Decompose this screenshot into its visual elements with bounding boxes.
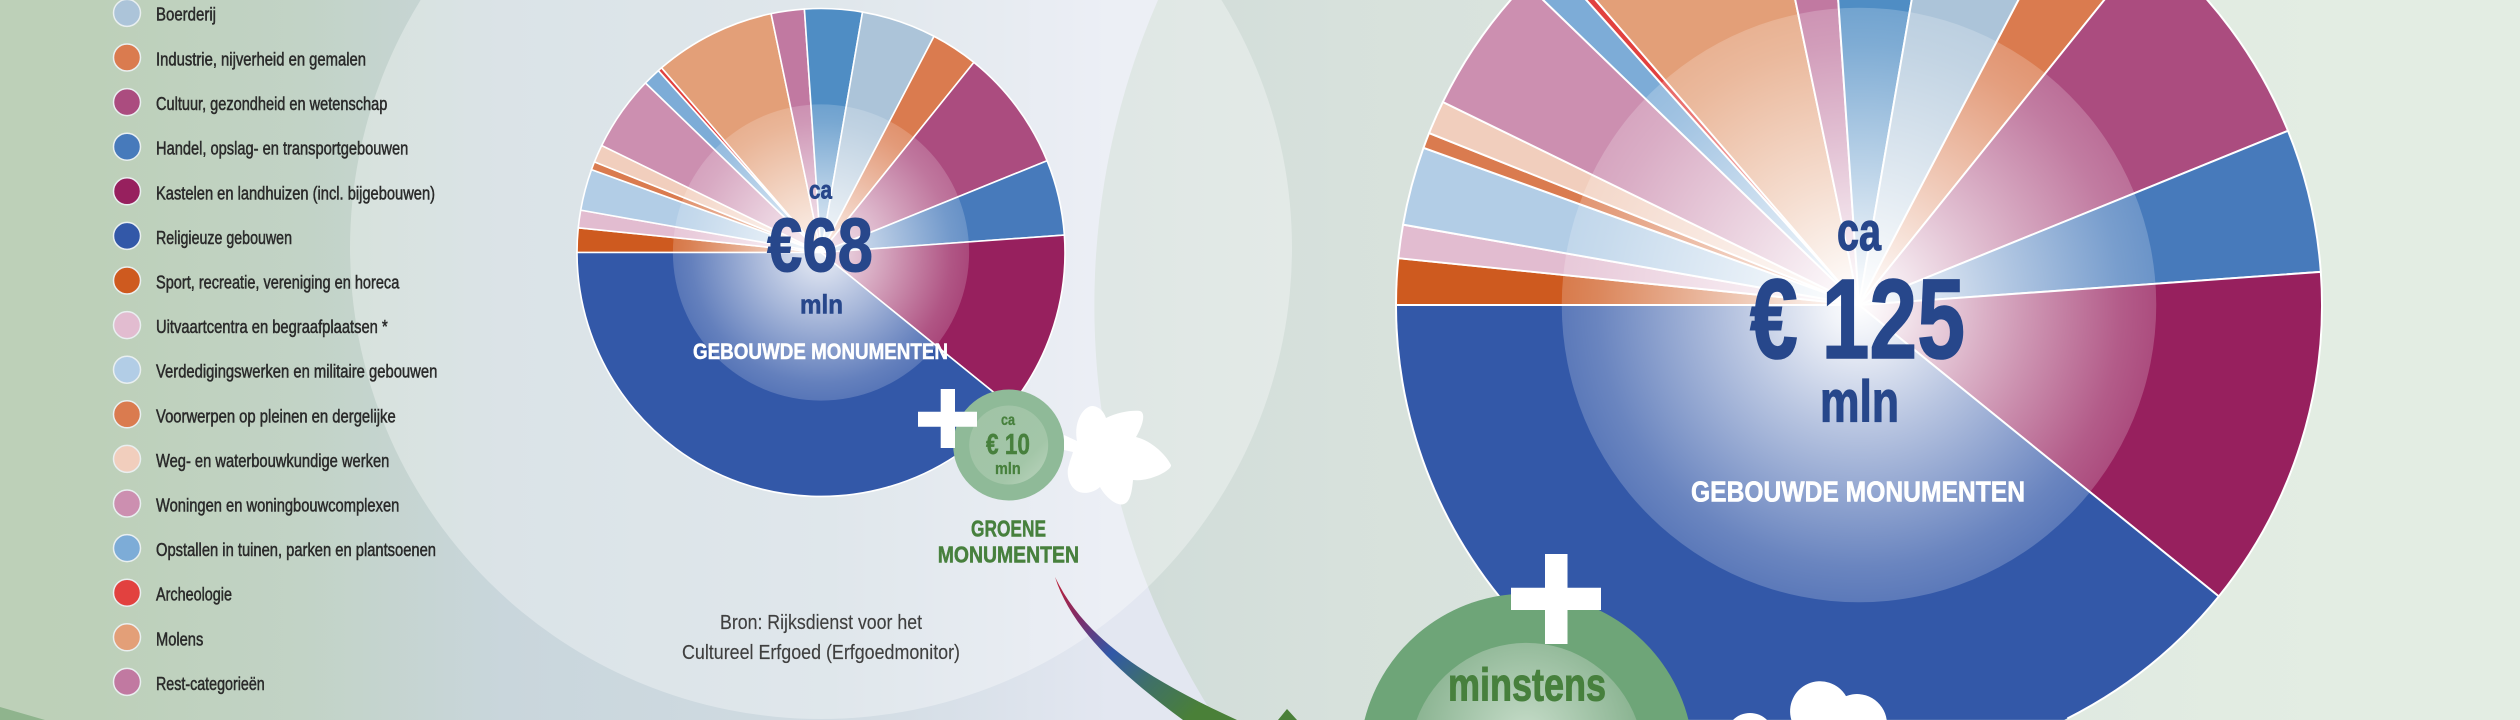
legend item: Woningen [114,490,399,517]
legend item: Sport [114,267,400,294]
legend item: Cultuur [114,89,387,116]
legend item: Sport: Sport, recreatie, vereniging en horeca [156,272,400,292]
legend item: Opstallen [114,535,436,562]
legend item: Opstallen: Opstallen in tuinen, parken en plantsoenen [156,540,436,560]
small green circle: mln [995,459,1021,478]
large pie label: ca: ca [1837,202,1882,262]
legend item: Voorwerpen: Voorwerpen op pleinen en dergelijke [156,406,396,426]
small pie chart: gebouwde monumenten [577,8,1065,496]
large pie chart: gebouwde monumenten [1396,0,2322,720]
legend item: Cultuur: Cultuur, gezondheid en wetenschap [156,94,387,114]
label: groene monumenten: GROENE [971,516,1046,542]
small pie label: ca: ca [809,174,832,204]
legend item: Religieuze gebouwen [114,222,292,249]
legend item: Weg- en waterbouw [114,445,389,472]
large background circle [1094,0,2520,720]
legend item: Woningen: Woningen en woningbouwcomplexen [156,496,399,516]
arrow: curved gradient [1055,577,1237,720]
legend item: Voorwerpen [114,401,396,428]
label: groene monumenten: MONUMENTEN [938,542,1079,568]
source note: Bron: Rijksdienst voor het [720,611,922,634]
legend [114,0,437,695]
large pie value: € 125 [1750,256,1965,382]
small pie value: €68 [767,204,873,288]
large green circle [1364,594,1688,720]
legend item: Weg- en waterbouw: Weg- en waterbouwkundige werken [156,451,389,471]
legend item: Molens [114,624,203,651]
large pie heading: GEBOUWDE MONUMENTEN [1691,476,2025,508]
icon: white leaf [1064,406,1171,504]
icon: large plus [1511,554,1601,644]
icon: small plus [918,389,977,448]
small green circle: ca [1001,412,1015,429]
legend item: Archeologie [114,579,232,606]
legend item: Verdedigingswerken [114,356,437,383]
label: groene monumenten [938,516,1079,568]
source note [682,611,960,664]
legend item: Verdedigingswerken: Verdedigingswerken en militaire gebouwen [156,362,437,382]
small background circle [350,0,1292,719]
icon: white cloud [1733,681,1887,720]
legend item: Uitvaartcentra: Uitvaartcentra en begraafplaatsen * [156,317,388,337]
corner shape bottom left [0,707,45,720]
legend item: Rest-categorieen [114,668,265,695]
legend item: Archeologie: Archeologie [156,585,232,605]
legend item: Uitvaartcentra [114,312,388,339]
legend item: Boerderij: Boerderij [156,4,216,24]
large pie label: mln: mln [1820,370,1899,434]
legend item: Kastelen [114,178,435,205]
legend item: Handel: Handel, opslag- en transportgebouwen [156,139,408,159]
small green circle [953,390,1064,500]
small pie heading: GEBOUWDE MONUMENTEN [693,339,948,364]
legend item: Molens: Molens [156,629,203,649]
legend item: Industrie [114,44,366,71]
source note: Cultureel Erfgoed (Erfgoedmonitor) [682,641,960,664]
small pie label: mln: mln [800,290,843,320]
legend item: Industrie: Industrie, nijverheid en gemalen [156,50,366,70]
legend item: Handel [114,133,408,160]
legend item: Boerderij [114,0,216,26]
arrow head [1278,709,1297,720]
large green circle: minstens [1448,659,1606,711]
small green circle: € 10 [986,429,1030,461]
legend item: Kastelen: Kastelen en landhuizen (incl. bijgebouwen) [156,183,435,203]
legend item: Rest-categorieen: Rest-categorieën [156,674,265,694]
legend item: Religieuze gebouwen: Religieuze gebouwen [156,228,292,248]
